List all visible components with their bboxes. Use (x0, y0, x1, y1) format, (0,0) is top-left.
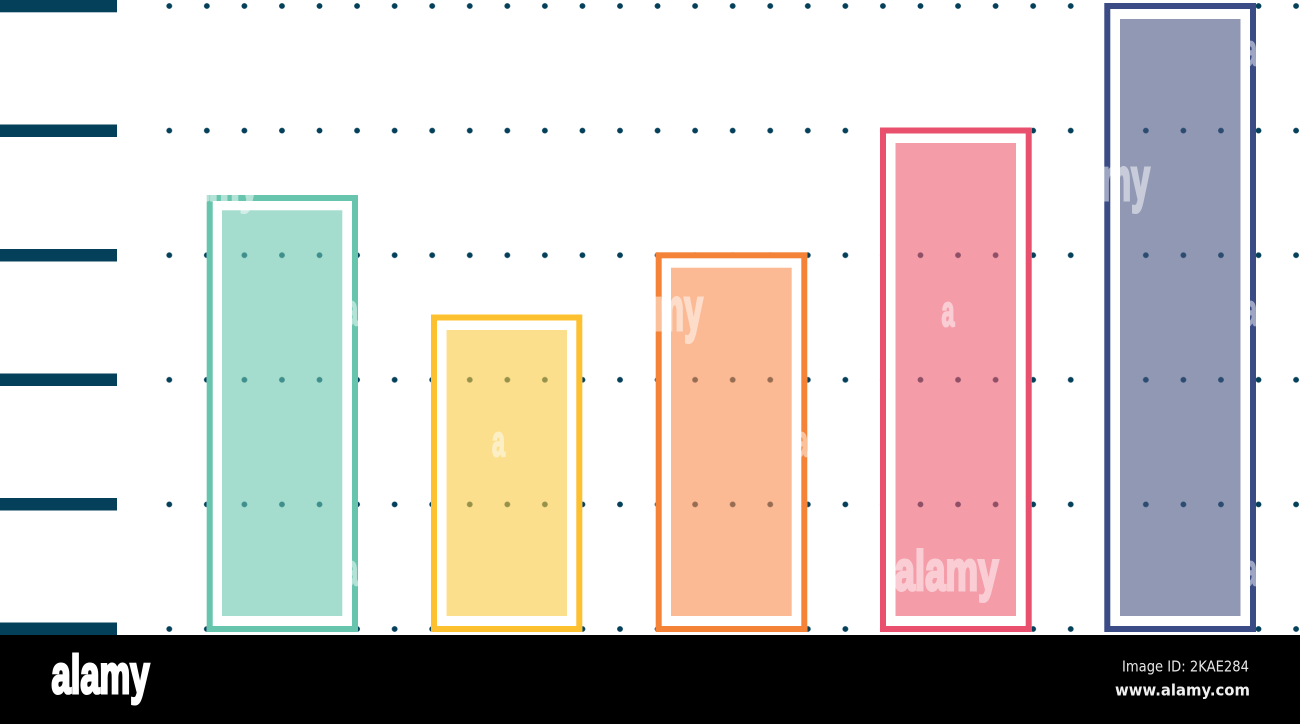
image id: Image ID: 2KAE284 (1122, 658, 1249, 676)
watermarks (160, 26, 1257, 602)
watermarks: a (1244, 546, 1257, 595)
dotted grid lines (150, 0, 1300, 635)
y axis ticks (0, 0, 117, 635)
bar 2: yellow (431, 314, 582, 632)
watermarks: alamy (160, 146, 259, 213)
website: www.alamy.com (1115, 680, 1250, 700)
watermarks: my (1101, 146, 1150, 213)
bar 1: teal (207, 195, 358, 632)
bar 4: pink (880, 128, 1032, 632)
watermarks: my (654, 276, 703, 343)
bar 5: navy (1104, 3, 1256, 632)
watermarks: a (492, 417, 505, 466)
footer logo: alamy (52, 645, 150, 705)
watermarks: a (1244, 286, 1257, 335)
watermarks: a (795, 417, 808, 466)
watermarks: a (942, 287, 955, 336)
watermarks: a (1244, 26, 1257, 75)
bar 3: orange (656, 252, 807, 632)
footer bar (0, 635, 1300, 724)
watermarks: a (345, 546, 358, 595)
watermarks: alamy (894, 539, 998, 602)
watermarks: a (345, 286, 358, 335)
